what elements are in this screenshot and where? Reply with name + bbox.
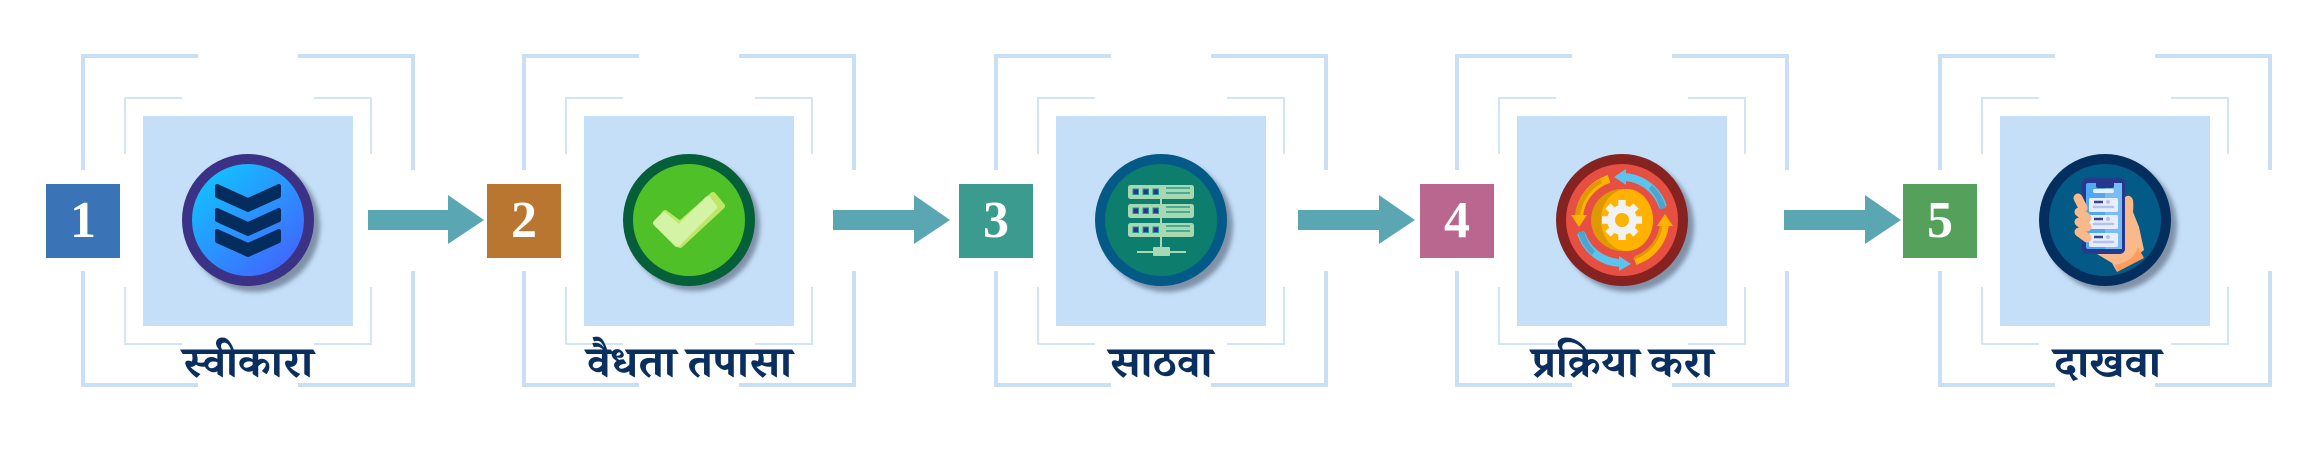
number badge 4: 4 bbox=[1444, 192, 1470, 249]
arrow 4 bbox=[1784, 195, 1901, 244]
number badge 4 bbox=[1420, 184, 1494, 258]
label: साठवा bbox=[1106, 338, 1216, 387]
outer and inner brackets bbox=[1940, 56, 2270, 385]
number badge 2: 2 bbox=[511, 192, 537, 249]
outer and inner brackets bbox=[524, 56, 854, 385]
label: स्वीकारा bbox=[180, 337, 316, 387]
icon background square bbox=[1056, 116, 1266, 326]
icon background square bbox=[2000, 116, 2210, 326]
outer and inner brackets bbox=[83, 56, 413, 385]
icon: check mark bbox=[628, 159, 760, 291]
number badge 3: 3 bbox=[983, 192, 1009, 249]
icon: stacked chevrons bbox=[187, 159, 320, 292]
icon background square bbox=[143, 116, 353, 326]
icon: gear with cycle arrows bbox=[1561, 159, 1694, 292]
arrow 2 bbox=[833, 195, 950, 244]
arrow 1 bbox=[368, 195, 484, 244]
panel: step 3 bbox=[959, 56, 1326, 387]
label: वैधता तपासा bbox=[584, 336, 795, 387]
panel: step 2 bbox=[487, 56, 854, 387]
panel: step 1 bbox=[46, 56, 413, 387]
number badge 3 bbox=[959, 184, 1033, 258]
number badge 1: 1 bbox=[70, 192, 96, 249]
icon background square bbox=[584, 116, 794, 326]
outer and inner brackets bbox=[1457, 56, 1787, 385]
arrow 3 bbox=[1298, 195, 1415, 244]
icon: server rack bbox=[1100, 159, 1233, 292]
number badge 1 bbox=[46, 184, 120, 258]
panel: step 4 bbox=[1420, 56, 1787, 387]
label: दाखवा bbox=[2051, 338, 2164, 387]
icon: hand holding phone bbox=[2044, 159, 2177, 292]
panel: step 5 bbox=[1903, 56, 2270, 387]
number badge 5: 5 bbox=[1927, 192, 1953, 249]
icon background square bbox=[1517, 116, 1727, 326]
number badge 5 bbox=[1903, 184, 1977, 258]
outer and inner brackets bbox=[996, 56, 1326, 385]
number badge 2 bbox=[487, 184, 561, 258]
label: प्रक्रिया करा bbox=[1529, 337, 1716, 387]
